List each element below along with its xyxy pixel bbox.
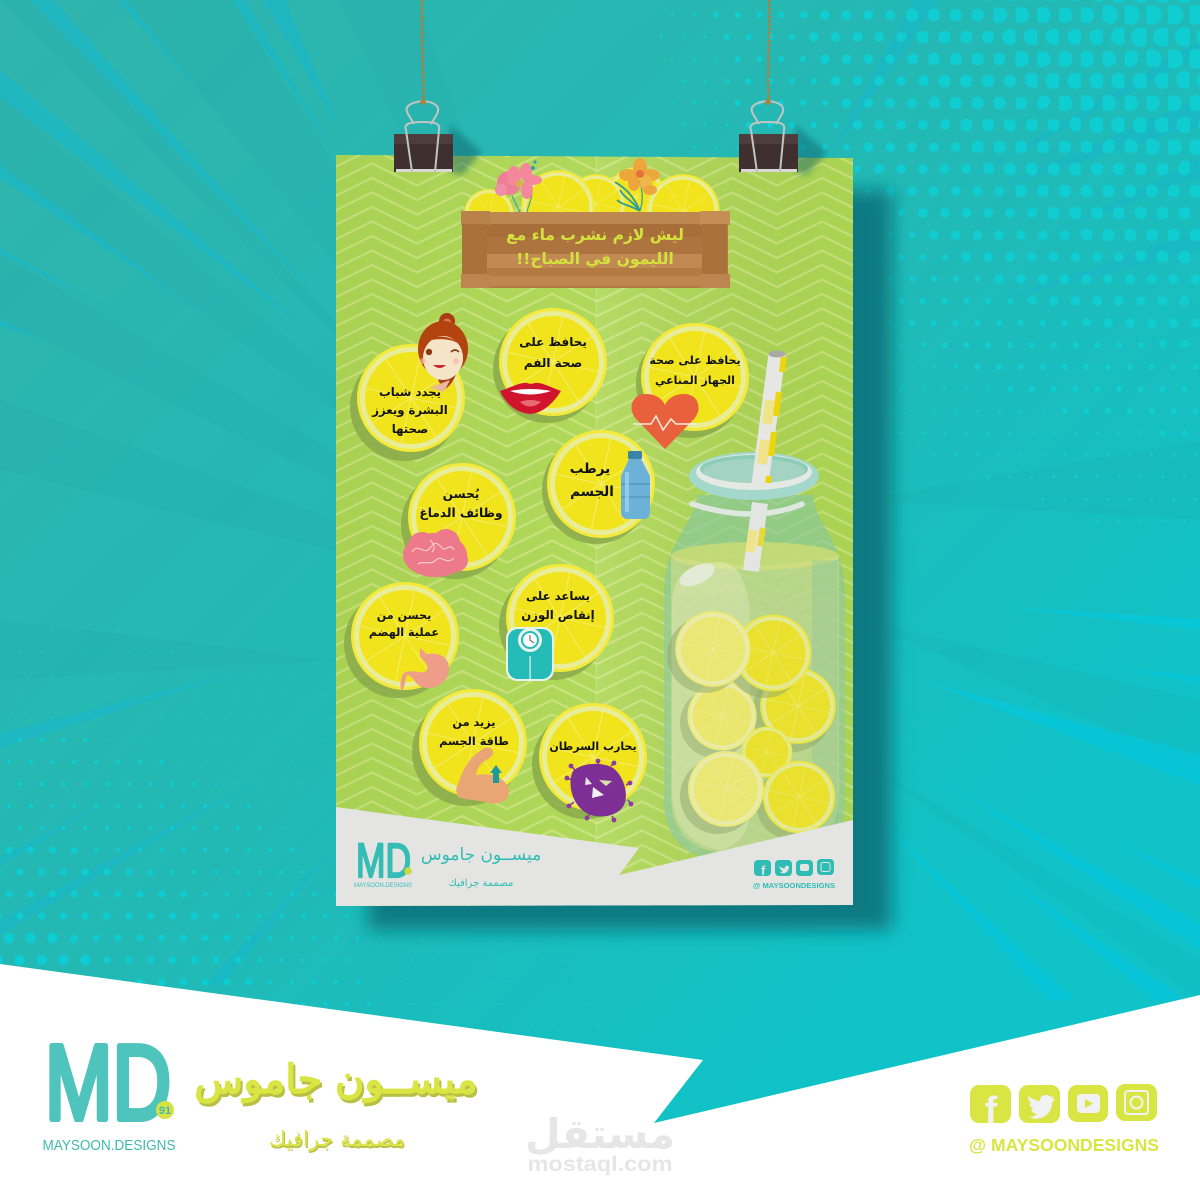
footer designer name: ميســون جاموس [196, 1060, 480, 1106]
crate title: الليمون في الصباح!! [516, 250, 674, 269]
wooden crate sign [461, 211, 730, 288]
pink flower [495, 160, 542, 212]
text: mouth: صحة الفم [524, 356, 582, 370]
social handle: @ MAYSOONDESIGNS [969, 1135, 1159, 1155]
text: hydrate: الجسم [570, 484, 614, 500]
jar mouth [689, 452, 819, 500]
text: brain [419, 487, 503, 520]
mostaql watermark: mostaql.com [528, 1153, 672, 1176]
text: cancer: يحارب السرطان [549, 740, 637, 753]
lemon: immune benefit [631, 322, 750, 449]
jar glass body [664, 495, 845, 860]
text: digestion: عملية الهضم [369, 626, 439, 639]
halftone dots top right [651, 0, 1200, 539]
crate title: ليش لازم نشرب ماء مع [506, 226, 684, 244]
text: immune [649, 354, 741, 387]
lemon: skin benefit [350, 343, 466, 461]
text: digestion [369, 609, 439, 639]
poster social icons and handle: @ MAYSOONDESIGNS [753, 881, 835, 890]
poster logo: MD [356, 835, 411, 888]
lemon: mouth benefit [493, 307, 608, 423]
poster name [421, 845, 541, 889]
poster bottom banner [336, 807, 853, 906]
icon: flexed arm with arrow [456, 748, 509, 803]
text: weight [521, 589, 595, 623]
text: mouth: يحافظ على [519, 335, 587, 349]
poster [336, 155, 853, 906]
poster name: مصممة جرافيك [449, 878, 513, 889]
poster paper with chevron pattern [336, 155, 853, 906]
jar neck ring [692, 504, 802, 514]
icon: heart with pulse [631, 394, 699, 449]
poster logo: MAYSOON.DESIGNS [354, 883, 412, 889]
poster social icons and handle: f [761, 863, 766, 878]
text: immune: يحافظ على صحة [649, 354, 741, 367]
footer designer name: مصممة جرافيك [270, 1129, 406, 1153]
text: skin: البشرة ويعزز [371, 403, 448, 418]
footer designer name [194, 1057, 480, 1153]
text: digestion: يحسن من [377, 609, 431, 622]
lemon: energy benefit [412, 688, 528, 806]
icon: twitter [1028, 1095, 1055, 1119]
straw lower [750, 503, 763, 571]
poster shadow [368, 190, 892, 930]
mason jar with lemon slices [664, 350, 845, 860]
lemon: hydration benefit [542, 429, 656, 544]
text: energy [439, 716, 509, 748]
icon: girl face [418, 313, 468, 392]
text: brain: وظائف الدماغ [419, 506, 503, 520]
text: hydrate [570, 461, 614, 500]
footer logo: 91 [159, 1105, 171, 1117]
icon: brain [403, 529, 468, 577]
text: mouth [519, 335, 587, 370]
text: weight: يساعد على [526, 589, 590, 603]
icon: stomach [401, 648, 449, 691]
text: energy: طاقة الجسم [439, 735, 509, 748]
icon: lips [500, 383, 561, 414]
white footer band [0, 964, 1200, 1200]
halftone dots lower left [0, 620, 600, 1040]
lemon: digestion benefit [344, 581, 460, 698]
footer social icons [969, 1084, 1159, 1155]
text: skin [371, 385, 448, 437]
binder clip right [739, 99, 827, 175]
text: immune: الجهاز المناعي [655, 374, 735, 387]
text: skin: صحتها [392, 422, 428, 437]
straw upper [760, 350, 786, 484]
poster social icons and handle [753, 859, 835, 890]
orange flower [615, 158, 660, 211]
icon: facebook: f [985, 1090, 998, 1132]
icon: water bottle [621, 451, 650, 519]
crate title [506, 226, 684, 269]
jar lemon slices [667, 611, 836, 840]
icon: weighing scale [506, 627, 554, 681]
footer designer name: ميســون جاموس [194, 1057, 478, 1103]
icon: youtube [1077, 1094, 1100, 1113]
text: skin: يجدد شباب [379, 385, 441, 399]
jar front glass tint [664, 595, 845, 860]
hanging string right [767, 0, 770, 102]
footer designer name: مصممة جرافيك [269, 1127, 405, 1151]
text: hydrate: يرطب [570, 461, 610, 477]
text: brain: يُحسن [443, 487, 479, 501]
icon: instagram [1125, 1091, 1148, 1114]
binder clip left [394, 99, 482, 175]
footer logo: MAYSOON.DESIGNS [42, 1137, 176, 1154]
lemon: brain benefit [401, 462, 517, 579]
lemon: cancer benefit [532, 702, 648, 822]
text: energy: يزيد من [452, 716, 496, 729]
text: weight: إنقاص الوزن [521, 608, 595, 623]
hanging string left [422, 0, 423, 102]
mostaql watermark: مستقل [525, 1110, 675, 1158]
poster name: ميســون جاموس [421, 845, 541, 865]
lemons behind crate [464, 167, 720, 212]
footer logo: MD [45, 1024, 171, 1142]
icon: virus [565, 759, 633, 822]
lemon: weight benefit [499, 563, 615, 681]
